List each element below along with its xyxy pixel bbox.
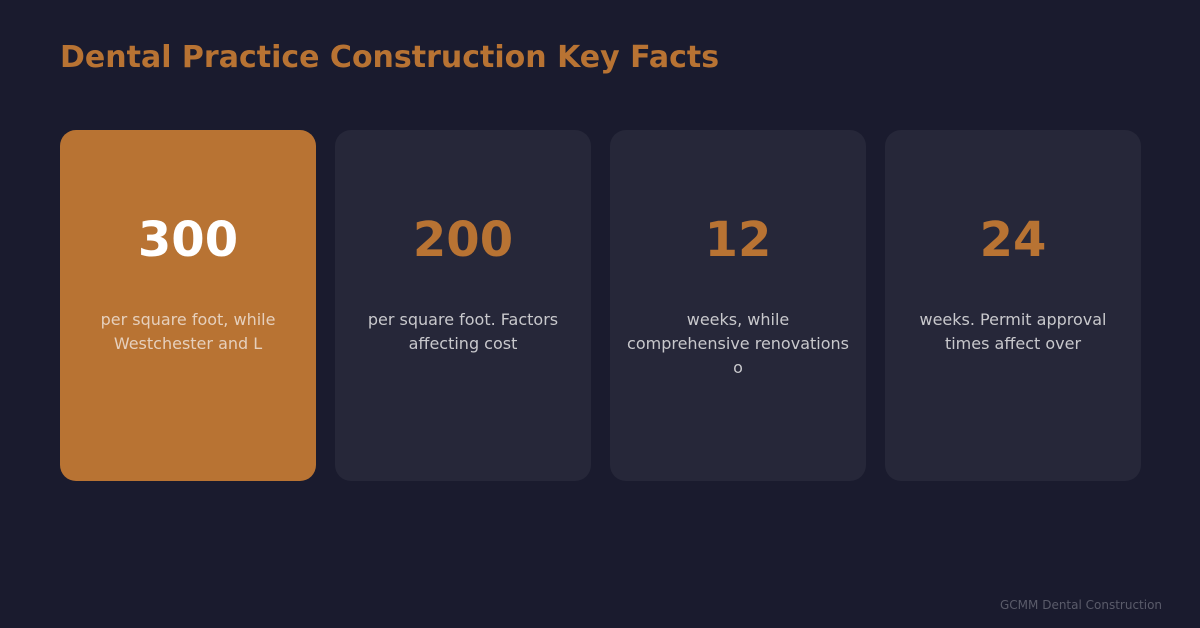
title: Dental Practice Construction Key Facts	[60, 40, 719, 75]
card: 300	[60, 130, 316, 481]
stat number: 300	[138, 212, 238, 268]
card: 200	[335, 130, 591, 481]
stat text: per square foot, while Westchester and L	[101, 310, 275, 353]
stat text: per square foot. Factors affecting cost	[368, 310, 558, 353]
footer: GCMM Dental Construction	[1000, 598, 1162, 612]
card: 24	[885, 130, 1141, 481]
stat number: 12	[705, 212, 771, 268]
stat text: weeks. Permit approval times affect over	[919, 310, 1106, 353]
card: 12	[610, 130, 866, 481]
stat number: 200	[413, 212, 513, 268]
stat text: weeks, while comprehensive renovations o	[627, 310, 849, 377]
stat number: 24	[980, 212, 1046, 268]
